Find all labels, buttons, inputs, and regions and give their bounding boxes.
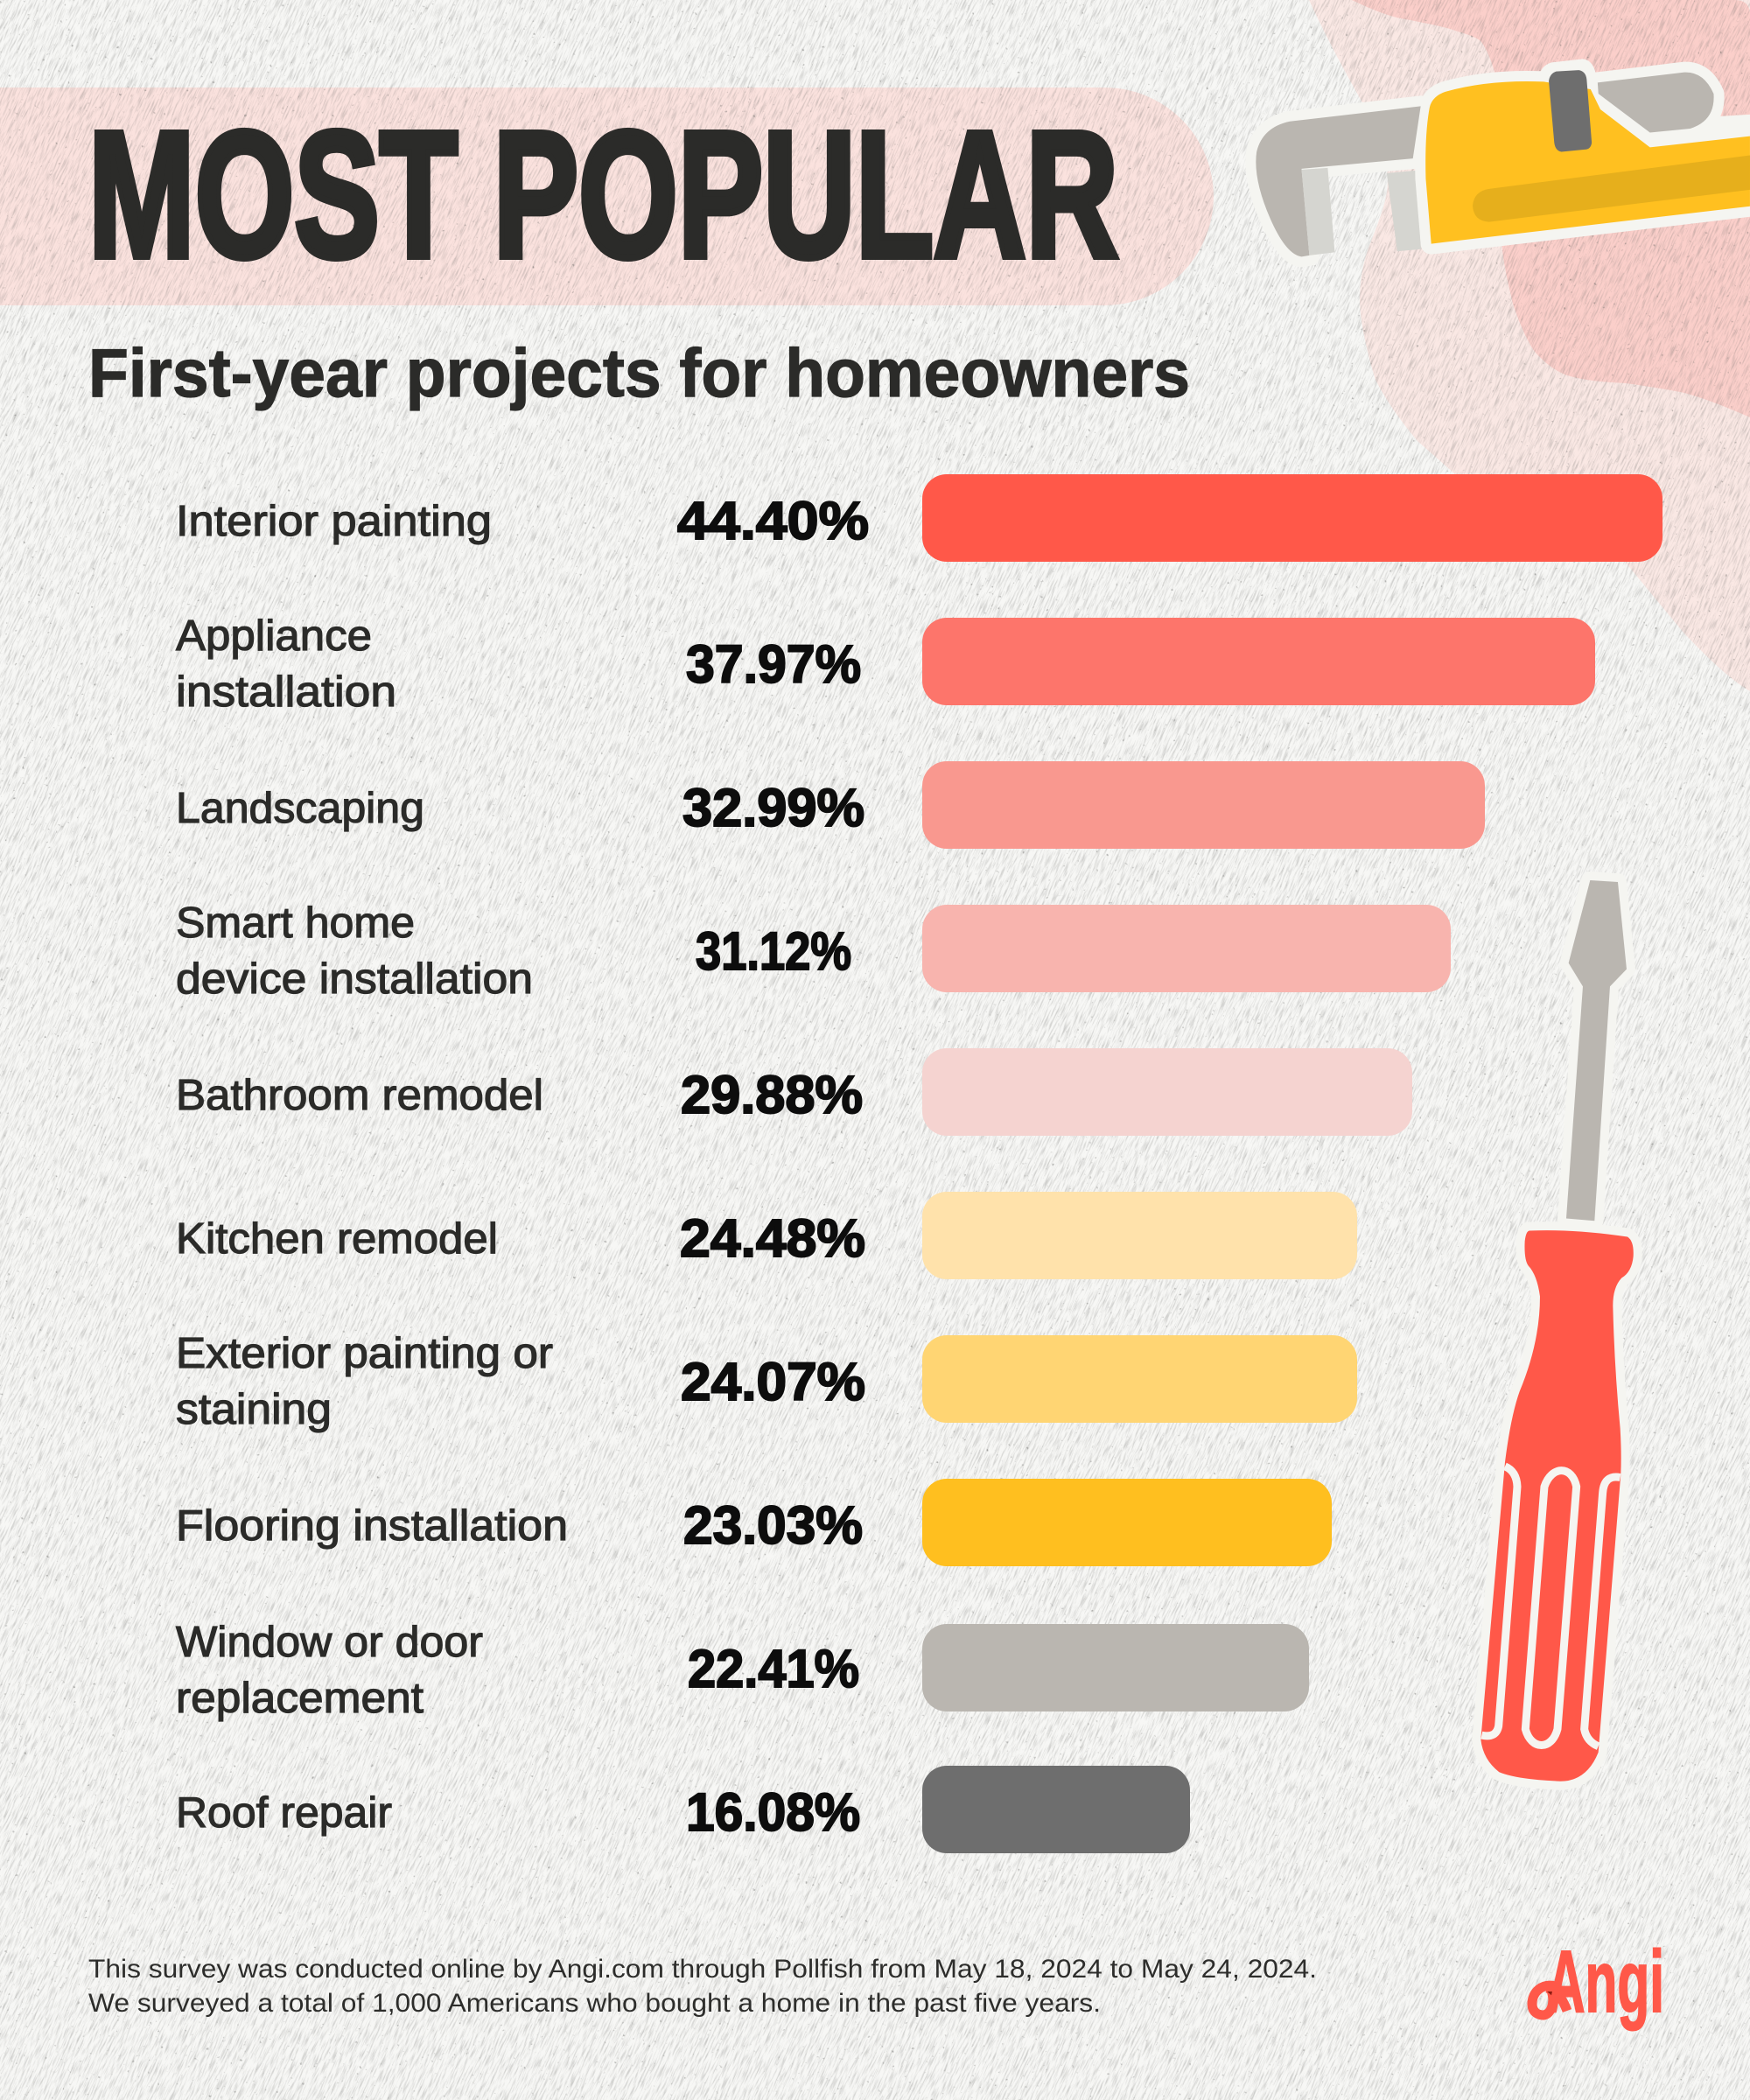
label (176, 612, 396, 716)
bar (922, 1624, 1309, 1712)
value: 29.88% (681, 1065, 863, 1124)
label: replacement (176, 1675, 424, 1722)
screwdriver blade (1566, 880, 1627, 1221)
bar (922, 1766, 1190, 1853)
bar (922, 1335, 1357, 1423)
row: Landscaping (176, 761, 1485, 849)
bar (922, 1048, 1412, 1136)
bar (922, 761, 1485, 849)
title: MOST POPULAR (88, 94, 1118, 295)
value: 22.41% (688, 1639, 859, 1698)
wrench jaw tooth (1301, 168, 1334, 256)
label: Roof repair (176, 1789, 392, 1837)
bar (922, 618, 1595, 705)
bar (922, 1479, 1332, 1566)
label: Landscaping (176, 785, 424, 832)
label: device installation (176, 956, 533, 1003)
footnote: We surveyed a total of 1,000 Americans who bought a home in the past five years. (88, 1989, 1101, 2018)
label: Smart home (176, 900, 415, 947)
footnote (88, 1955, 1317, 2018)
value: 37.97% (686, 634, 861, 694)
label (176, 1330, 553, 1433)
label: Window or door (176, 1619, 483, 1666)
screwdriver handle (1480, 1230, 1634, 1782)
logo: Angi (1532, 1933, 1664, 2031)
row: Bathroom remodel (176, 1048, 1412, 1136)
screwdriver handle grooves (1481, 1466, 1620, 1746)
label: Appliance (176, 612, 372, 660)
label (176, 900, 533, 1003)
label: staining (176, 1386, 332, 1433)
footnote: This survey was conducted online by Angi.com through Pollfish from May 18, 2024 to May 24, 2024. (88, 1955, 1317, 1984)
label: Flooring installation (176, 1502, 568, 1550)
row: Window or door replacement (176, 1619, 1309, 1722)
row: Flooring installation (176, 1479, 1332, 1566)
logo: Angi: Angi (1547, 1933, 1664, 2031)
title banner (0, 88, 1214, 305)
wrench upper jaw and shaft (1256, 106, 1421, 256)
bar (922, 474, 1662, 562)
value: 24.07% (681, 1352, 865, 1411)
row: Smart home device installation (176, 900, 1451, 1003)
label: Exterior painting or (176, 1330, 553, 1377)
background blob: light pink (1309, 0, 1750, 691)
value: 32.99% (682, 778, 864, 837)
wrench thumb end (1598, 73, 1714, 133)
wrench yellow body (1425, 81, 1750, 244)
icon: screwdriver (1480, 880, 1634, 1782)
row: Exterior painting or staining (176, 1330, 1357, 1433)
wrench clamp (1549, 70, 1592, 151)
wrench lower jaw (1387, 171, 1421, 251)
row: Interior painting (176, 474, 1662, 562)
label: Kitchen remodel (176, 1215, 498, 1263)
value: 44.40% (677, 491, 869, 550)
row: Kitchen remodel (176, 1192, 1357, 1279)
value: 23.03% (683, 1495, 863, 1555)
label: Bathroom remodel (176, 1072, 543, 1119)
label (176, 1619, 483, 1722)
subtitle: First-year projects for homeowners (88, 334, 1190, 411)
value: 16.08% (686, 1782, 860, 1842)
label: installation (176, 668, 396, 716)
bar (922, 1192, 1357, 1279)
value: 31.12% (696, 921, 851, 981)
background blob: darker pink (1352, 0, 1750, 417)
icon: pipe wrench (1256, 59, 1750, 256)
row: Roof repair (176, 1766, 1190, 1853)
bar (922, 905, 1451, 992)
row: Appliance installation (176, 612, 1595, 716)
wrench body stripe (1473, 156, 1750, 222)
value: 24.48% (680, 1208, 865, 1268)
label: Interior painting (176, 498, 492, 545)
